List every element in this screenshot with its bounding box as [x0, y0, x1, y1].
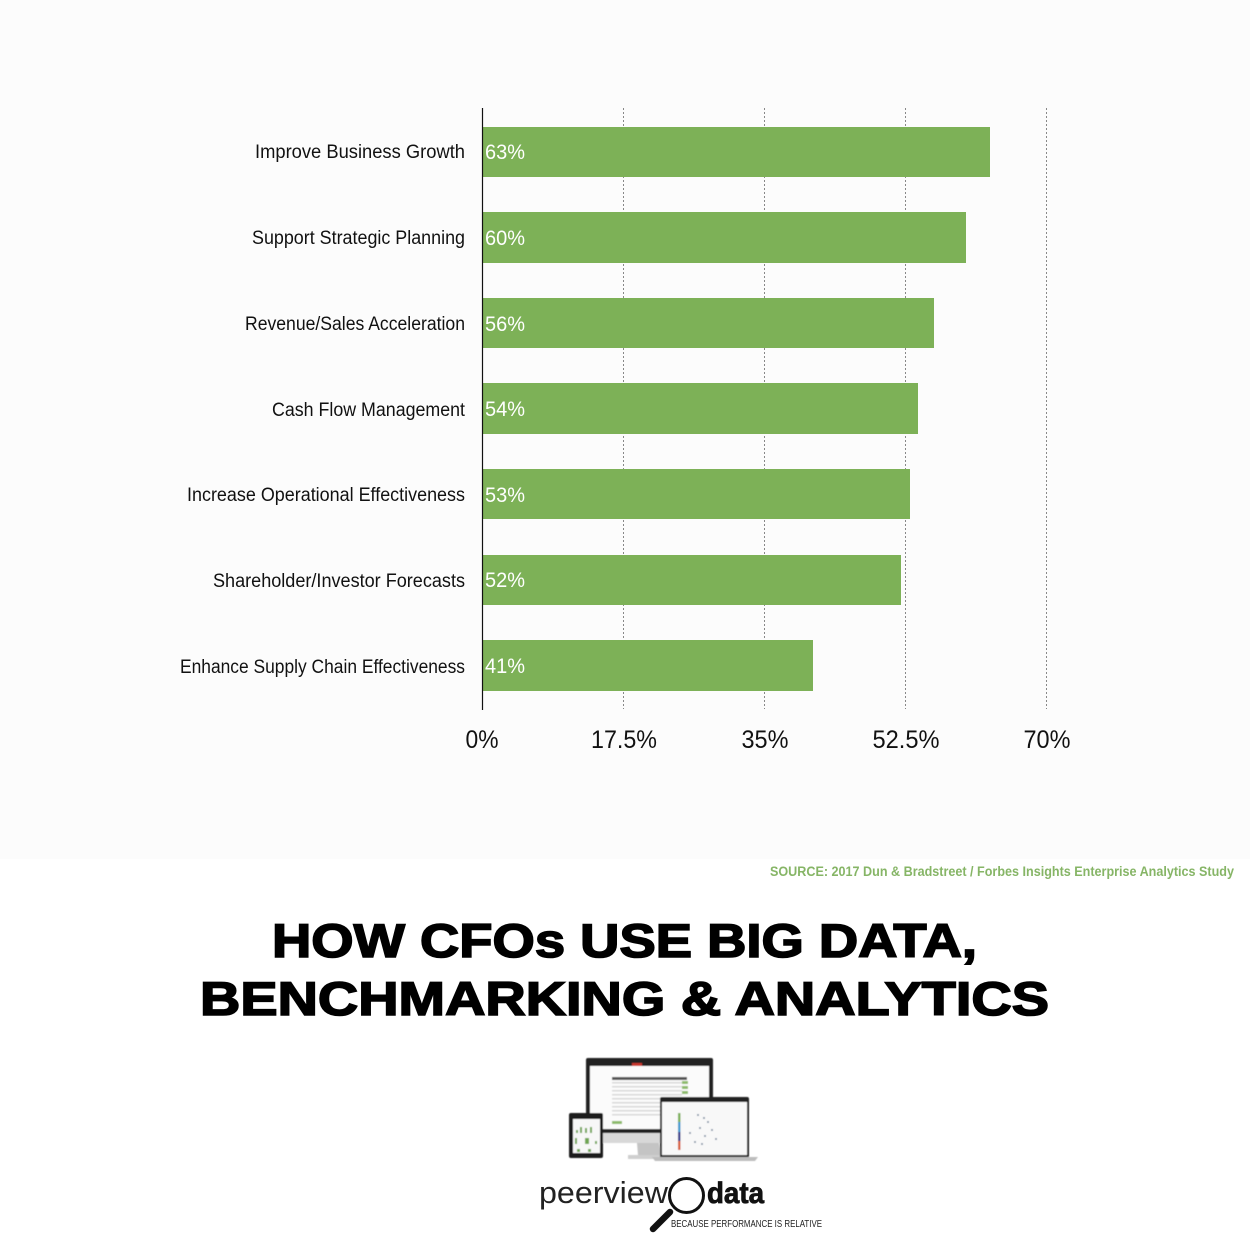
bar: Shareholder/Investor Forecasts — [213, 555, 901, 605]
bar: Cash Flow Management: 54% — [485, 398, 525, 421]
bar chart — [180, 108, 1070, 754]
bar: Enhance Supply Chain Effectiveness: Enhance Supply Chain Effectiveness — [180, 657, 465, 678]
x axis labels: 52.5% — [872, 726, 940, 754]
logo: peerview data — [539, 1175, 822, 1230]
bar: Increase Operational Effectiveness — [187, 469, 910, 519]
x axis labels: 35% — [742, 726, 788, 754]
bar: Cash Flow Management: Cash Flow Management — [272, 400, 466, 421]
icon: device mockups — [569, 1058, 758, 1161]
bar: Revenue/Sales Acceleration — [245, 298, 934, 348]
logo: peerview data: BECAUSE PERFORMANCE IS RELATIVE — [671, 1219, 822, 1230]
bar: Enhance Supply Chain Effectiveness — [180, 640, 813, 691]
bar: Shareholder/Investor Forecasts: Shareholder/Investor Forecasts — [213, 571, 465, 592]
bar: Improve Business Growth: Improve Business Growth — [255, 142, 465, 163]
icon: tablet — [569, 1113, 603, 1158]
title: HOW CFOs USE BIG DATA, — [272, 914, 977, 967]
x axis labels — [466, 726, 1070, 754]
bar: Improve Business Growth: 63% — [485, 141, 525, 164]
panel: chart background — [0, 0, 1250, 859]
bar: Support Strategic Planning — [252, 212, 966, 263]
logo: peerview data: data — [707, 1177, 764, 1210]
bar: Revenue/Sales Acceleration: Revenue/Sales Acceleration — [245, 314, 465, 335]
bar: Increase Operational Effectiveness: 53% — [485, 484, 525, 507]
bar: Increase Operational Effectiveness: Increase Operational Effectiveness — [187, 485, 465, 506]
logo: peerview data: peerview — [539, 1175, 669, 1210]
icon: magnifying glass — [653, 1178, 704, 1229]
icon: laptop — [652, 1097, 758, 1161]
bar: Support Strategic Planning: 60% — [485, 227, 525, 250]
x axis labels: 70% — [1024, 726, 1070, 754]
bar: Improve Business Growth — [255, 127, 990, 177]
bar: Revenue/Sales Acceleration: 56% — [485, 313, 525, 336]
bar: Shareholder/Investor Forecasts: 52% — [485, 569, 525, 592]
x axis labels: 17.5% — [591, 726, 657, 754]
title — [200, 914, 1049, 1025]
bar: Cash Flow Management — [272, 383, 918, 434]
title: BENCHMARKING & ANALYTICS — [200, 972, 1049, 1025]
x axis labels: 0% — [466, 726, 498, 754]
bar: Support Strategic Planning: Support Strategic Planning — [252, 228, 465, 249]
icon: desktop monitor — [586, 1058, 713, 1159]
bar: Enhance Supply Chain Effectiveness: 41% — [485, 655, 525, 678]
